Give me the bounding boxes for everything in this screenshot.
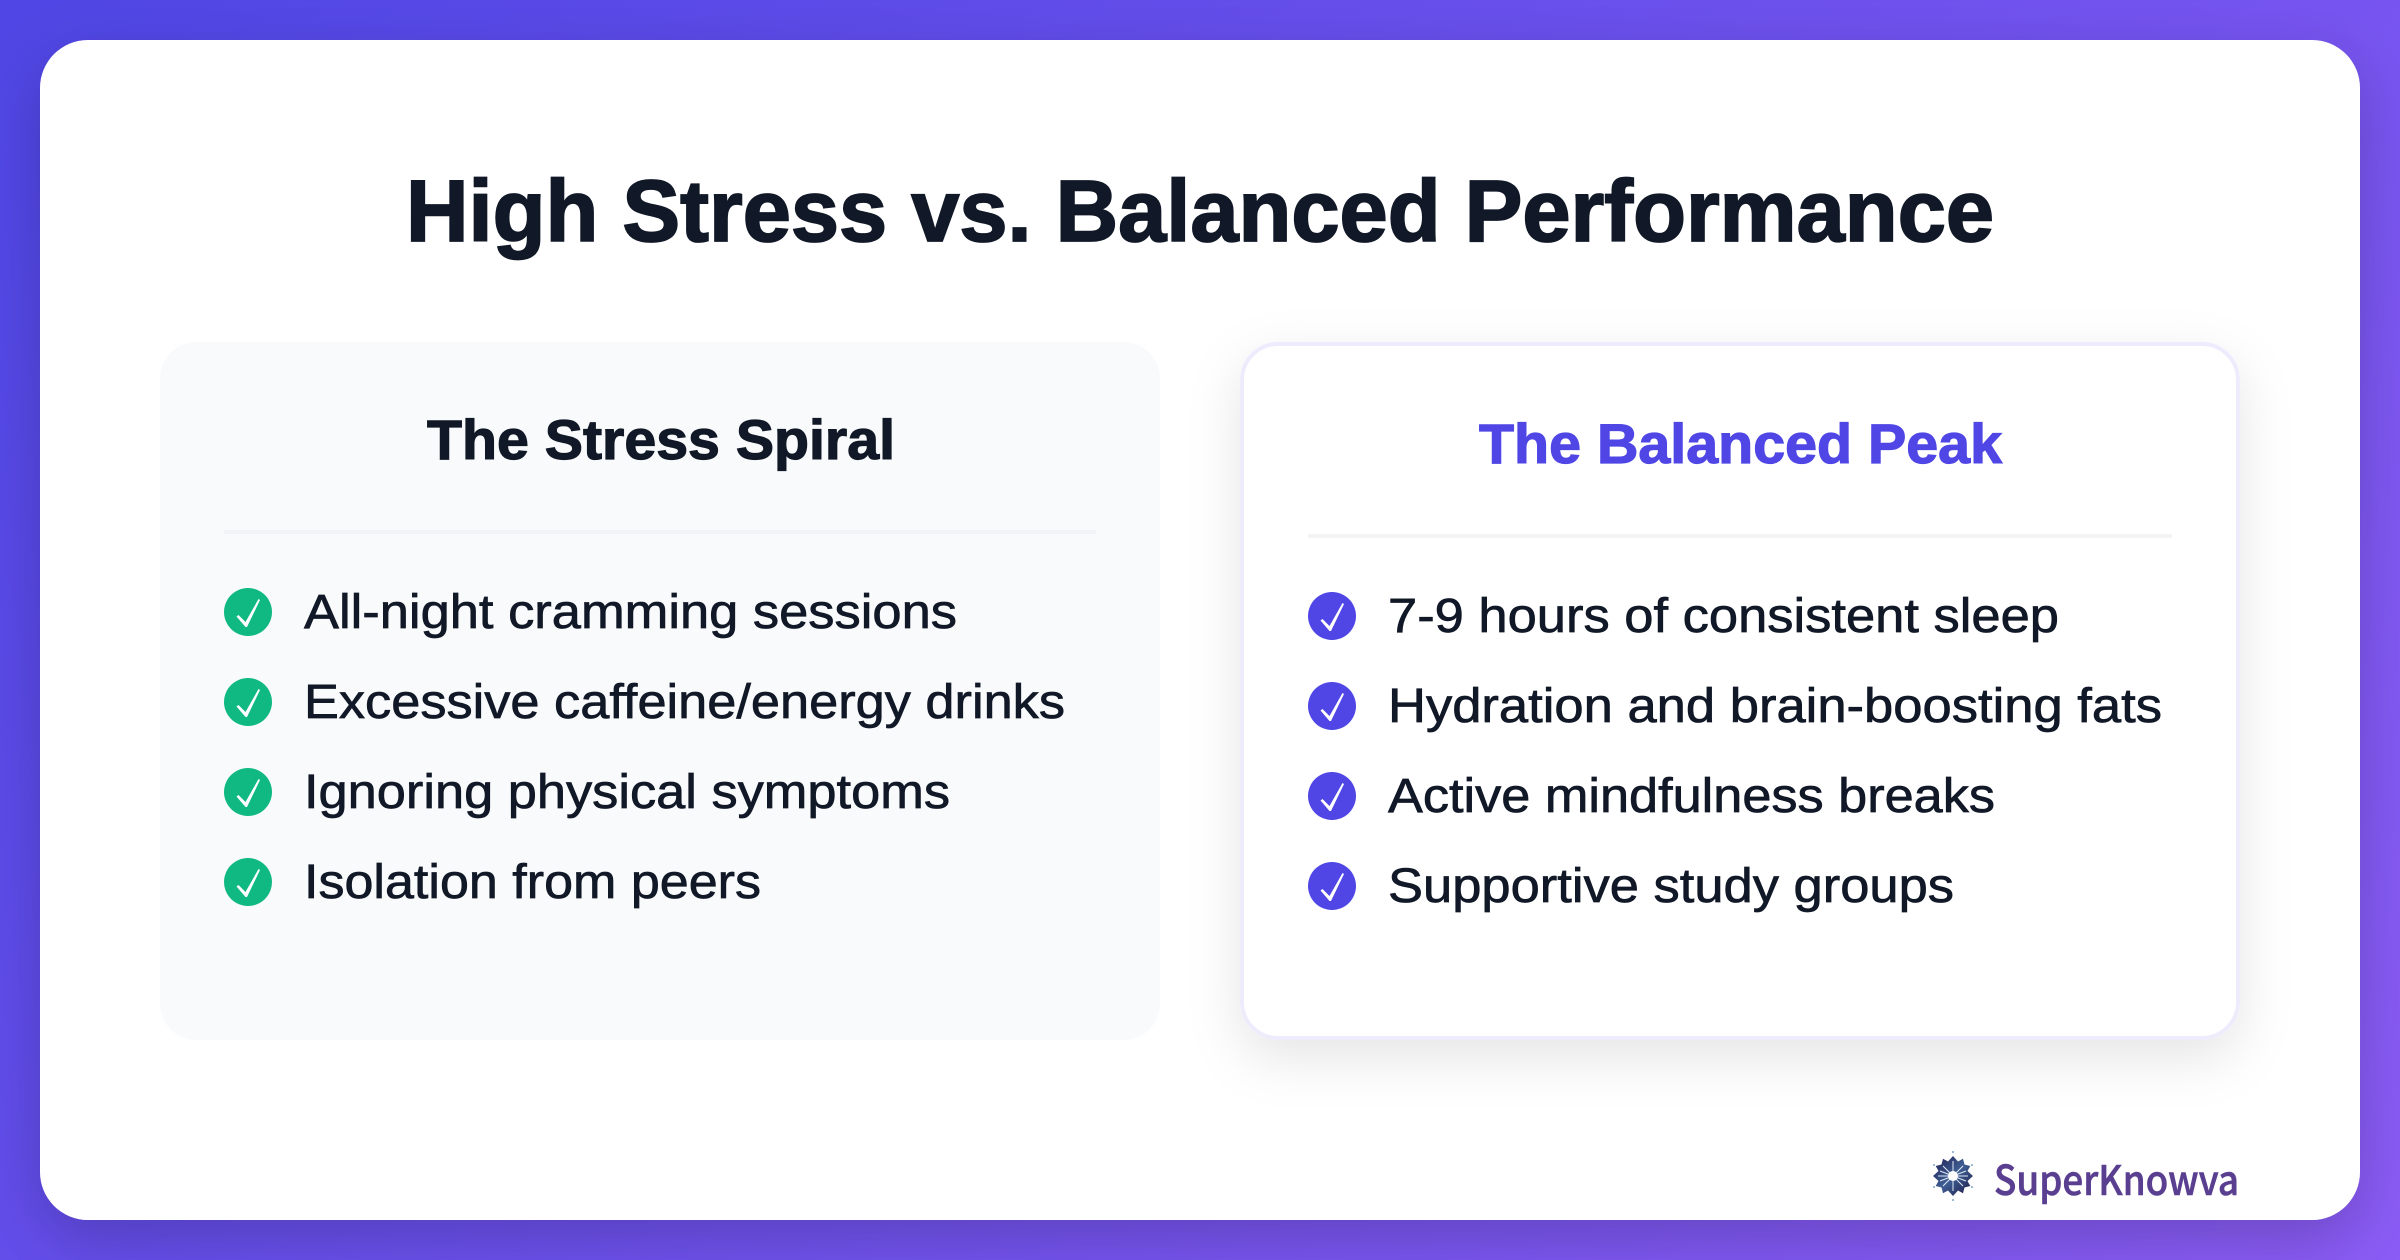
list item: study groups: Supportive study groups xyxy=(1388,860,1954,913)
title: High Stress vs. Balanced Performance xyxy=(406,163,1994,260)
panel background xyxy=(1242,344,2238,1038)
panel: the balanced peak xyxy=(1242,344,2238,1038)
list item: hydration: Hydration and brain-boosting fats xyxy=(1388,680,2162,733)
list item: isolation: Isolation from peers xyxy=(304,856,761,909)
icon: star emblem xyxy=(1933,1151,1973,1201)
logo wordmark: SuperKnowva xyxy=(1994,1147,2239,1207)
list item: all-night cramming: All-night cramming sessions xyxy=(304,586,957,639)
heading: the balanced peak: The Balanced Peak xyxy=(1479,412,2003,475)
list item: sleep: 7-9 hours of consistent sleep xyxy=(1388,590,2059,643)
list item: mindfulness: Active mindfulness breaks xyxy=(1388,770,1995,823)
list item: ignoring symptoms: Ignoring physical symptoms xyxy=(304,766,950,819)
panel background xyxy=(160,342,1160,1040)
panel: the stress spiral xyxy=(160,342,1160,1040)
logo: SuperKnowva xyxy=(1933,1147,2239,1207)
list item: excessive caffeine: Excessive caffeine/energy drinks xyxy=(304,676,1065,729)
heading: the stress spiral: The Stress Spiral xyxy=(427,408,895,471)
